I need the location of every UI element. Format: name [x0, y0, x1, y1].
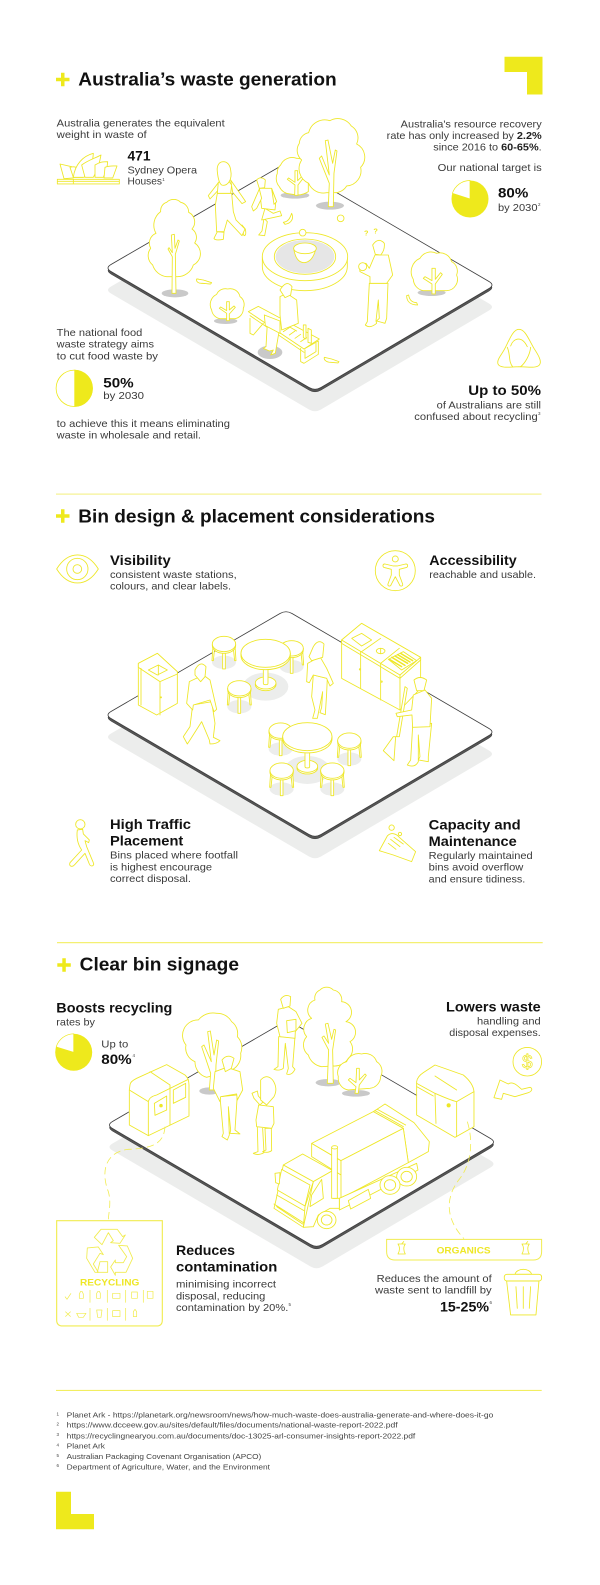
text: Boosts recycling: Boosts recycling — [56, 999, 172, 1015]
big tree left — [183, 1013, 242, 1095]
text: Visibility — [57, 552, 237, 593]
organics sign — [387, 1239, 542, 1260]
text: landfill reduction: 15-25% — [440, 1299, 490, 1315]
text: Sydney Opera Houses: Australia generates the equivalent — [57, 117, 225, 129]
text: Capacity and Maintenance: Maintenance — [429, 833, 517, 849]
small tree behind — [276, 158, 309, 199]
text: Visibility: consistent waste stations, — [110, 569, 237, 581]
text: Sydney Opera Houses: Sydney Opera — [128, 164, 197, 176]
footnotes: Planet Ark — [67, 1442, 105, 1451]
text: confused about recycling: confused about recycling — [414, 411, 538, 423]
text: Capacity and Maintenance: Capacity and — [429, 816, 521, 832]
footnotes: Department of Agriculture, Water, and the Environment — [67, 1462, 270, 1471]
text: Lowers waste: disposal expenses. — [449, 1027, 541, 1039]
icon: gloved hand with bubbles — [379, 825, 416, 862]
tree right — [303, 987, 356, 1086]
text: landfill reduction: waste sent to landfill by — [374, 1285, 493, 1297]
text: food waste strategy — [56, 327, 230, 442]
text: Sydney Opera Houses: weight in waste of — [56, 129, 147, 141]
text: High Traffic Placement: is highest encourage — [110, 861, 212, 873]
left tree — [148, 199, 200, 297]
text: Accessibility: Accessibility — [429, 552, 517, 568]
text: Boosts recycling: 4 — [132, 1053, 136, 1058]
text: landfill reduction: 6 — [490, 1300, 492, 1305]
section: Australia's waste generation — [55, 70, 543, 1529]
fountain — [262, 215, 348, 291]
footnotes: https://www.dcceew.gov.au/sites/default/files/documents/national-waste-report-2022.pdf — [67, 1421, 399, 1430]
icon: rubbish bin — [504, 1269, 542, 1315]
logo corner: bottom left — [56, 1492, 94, 1529]
divider — [56, 1390, 542, 1391]
standing man with cup: ? — [364, 229, 369, 238]
icon: dollar in hand: $ — [522, 1052, 533, 1074]
text: Reduces contamination — [176, 1242, 292, 1314]
text: Lowers waste: handling and — [477, 1015, 541, 1027]
banana peels and litter — [197, 213, 293, 284]
text: Capacity and Maintenance: Regularly maintained — [429, 850, 533, 862]
big tree — [297, 119, 365, 210]
child running — [252, 178, 282, 236]
text: resource recovery: Our national target is — [438, 162, 542, 174]
illustration: collection platform — [105, 987, 494, 1268]
footnotes: 5 — [56, 1453, 60, 1458]
standing man with cup — [359, 227, 393, 327]
text: Visibility: Visibility — [110, 552, 171, 568]
text: Sydney Opera Houses: Houses — [128, 176, 162, 188]
text: food waste strategy: to cut food waste by — [57, 350, 159, 362]
text: Reduces contamination: contamination — [176, 1259, 277, 1275]
illustration: park platform — [108, 119, 492, 411]
text: resource recovery — [387, 118, 542, 218]
footnotes: Australian Packaging Covenant Organisation (APCO) — [67, 1452, 261, 1461]
text: food waste strategy: to achieve this it means eliminating — [57, 418, 230, 430]
man on bench with laptop — [248, 284, 319, 363]
divider — [56, 494, 542, 495]
text: resource recovery: rate has only increased by 2.2% — [387, 130, 542, 142]
text: confused about recycling: 3 — [538, 411, 541, 416]
person with books — [274, 995, 302, 1074]
text: landfill reduction: Reduces the amount of — [377, 1273, 492, 1285]
text: food waste strategy: The national food — [57, 327, 142, 339]
garbage truck — [274, 1104, 429, 1229]
text: High Traffic Placement: Bins placed where footfall — [110, 850, 238, 862]
pie: 80% — [452, 180, 488, 218]
text: Sydney Opera Houses — [56, 117, 225, 188]
text: Accessibility: reachable and usable. — [429, 569, 536, 581]
text: Reduces contamination: 5 — [288, 1302, 292, 1307]
footnotes: 3 — [56, 1432, 60, 1437]
text: High Traffic Placement: correct disposal. — [110, 873, 191, 885]
furniture: stools and tables — [212, 636, 361, 796]
text: food waste strategy: waste strategy aims — [56, 339, 154, 351]
footnotes — [56, 1411, 493, 1471]
footnotes: 6 — [56, 1463, 60, 1468]
text: resource recovery: by 2030 — [498, 202, 538, 214]
single bin — [138, 653, 177, 715]
woman walking — [307, 642, 333, 718]
text: Reduces contamination: disposal, reducing — [176, 1290, 265, 1302]
recycling sign — [57, 1221, 162, 1326]
text: Capacity and Maintenance: and ensure tidiness. — [429, 873, 525, 885]
text: Sydney Opera Houses: 1 — [162, 177, 165, 182]
logo corner: top right — [504, 57, 542, 94]
text: Lowers waste: Lowers waste — [446, 998, 541, 1014]
footnotes: https://recyclingnearyou.com.au/documents/doc-13025-arl-consumer-insights-report-2022.pdf — [67, 1431, 416, 1440]
organics sign: ORGANICS — [437, 1245, 491, 1255]
text: landfill reduction — [374, 1269, 542, 1315]
text: confused about recycling — [414, 329, 542, 423]
text: resource recovery: 80% — [498, 185, 529, 201]
bin left — [129, 1065, 189, 1136]
icon: Sydney Opera House — [57, 153, 119, 184]
illustration: cafe platform — [108, 612, 492, 858]
text: resource recovery: Australia's resource recovery — [401, 118, 542, 130]
woman with cup — [252, 1077, 276, 1155]
text: Reduces contamination: minimising incorrect — [176, 1279, 276, 1291]
bin right — [417, 1065, 474, 1137]
standing man with cup: ? — [373, 227, 378, 236]
recycling sign: RECYCLING — [80, 1277, 139, 1287]
text: Boosts recycling: Up to — [101, 1039, 128, 1051]
small bush front — [210, 289, 244, 324]
person standing centre — [213, 1056, 243, 1140]
text: Sydney Opera Houses: 471 — [128, 147, 151, 163]
text: confused about recycling: Up to 50% — [468, 382, 542, 398]
heading: Bin design & placement considerations — [78, 506, 435, 526]
bush right — [338, 1053, 382, 1097]
plus icon — [56, 509, 70, 523]
text: High Traffic Placement: High Traffic — [110, 816, 191, 832]
person sweeping — [383, 677, 432, 766]
text: Reduces contamination: Reduces — [176, 1242, 235, 1258]
heading: Australia’s waste generation — [78, 70, 337, 90]
dashed connector right — [449, 1122, 471, 1239]
text: food waste strategy: by 2030 — [103, 390, 144, 402]
text: Visibility: colours, and clear labels. — [110, 581, 231, 593]
pie: 50% — [56, 370, 93, 407]
text: High Traffic Placement: Placement — [110, 833, 184, 849]
footnotes: 2 — [56, 1422, 60, 1426]
footnotes: 1 — [56, 1412, 60, 1416]
icon: recycling knot — [498, 329, 540, 367]
divider — [57, 942, 543, 943]
footnotes: 4 — [56, 1442, 60, 1448]
icon: eye — [57, 555, 98, 583]
text: resource recovery: 2 — [538, 202, 541, 207]
icon: walking figure — [70, 820, 94, 866]
pie: 80% — [55, 1034, 92, 1071]
section: Bin design and placement considerations — [56, 506, 536, 885]
text: confused about recycling: of Australians are still — [437, 399, 541, 411]
text: High Traffic Placement — [70, 816, 238, 885]
text: Accessibility — [375, 551, 536, 591]
text: Boosts recycling: 80% — [101, 1051, 132, 1067]
accepted and rejected item icons — [65, 1290, 153, 1321]
icon: accessibility person — [375, 551, 415, 591]
text: Boosts recycling: rates by — [56, 1017, 96, 1029]
text: food waste strategy: 50% — [103, 374, 134, 390]
bin station — [342, 623, 421, 710]
plus icon — [57, 958, 71, 972]
dashed connector left — [105, 1127, 165, 1221]
text: Capacity and Maintenance — [379, 816, 533, 885]
text: Reduces contamination: contamination by 20%. — [176, 1302, 288, 1314]
footnotes: Planet Ark - https://planetark.org/newsroom/news/how-much-waste-does-australia-generate-and-where-does-it-go — [67, 1411, 493, 1420]
plus icon — [56, 73, 70, 86]
person walking — [183, 664, 220, 744]
text: resource recovery: since 2016 to 60-65%. — [433, 142, 542, 154]
bush right — [197, 252, 457, 363]
woman walking — [208, 162, 246, 240]
text: Capacity and Maintenance: bins avoid overflow — [429, 862, 524, 874]
text: Boosts recycling — [55, 999, 172, 1071]
text: food waste strategy: waste in wholesale and retail. — [56, 430, 201, 442]
icons: apple cores — [398, 1241, 529, 1254]
icon: recycling arrows — [87, 1229, 133, 1275]
text: Lowers waste — [446, 998, 542, 1099]
heading: Clear bin signage — [80, 955, 239, 975]
section: Clear bin signage — [55, 955, 542, 1529]
